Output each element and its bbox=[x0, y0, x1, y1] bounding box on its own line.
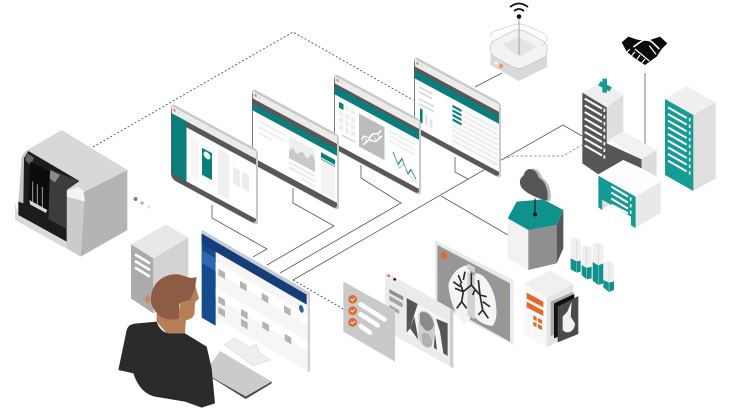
screen bbox=[202, 230, 310, 380]
icon: x-ray browser panel bbox=[385, 272, 453, 368]
desk items bbox=[210, 338, 272, 399]
monitor stand bbox=[224, 338, 270, 366]
person at workstation bbox=[118, 274, 215, 408]
icon: hospital annex bbox=[598, 160, 661, 228]
keyboard bbox=[210, 351, 272, 399]
icon: handshake bbox=[622, 37, 667, 65]
icon: lung scan panel bbox=[435, 240, 513, 345]
main workstation monitor bbox=[202, 230, 310, 380]
head bbox=[145, 274, 199, 320]
icon: desktop tower bbox=[131, 224, 188, 313]
icon: tall teal building bbox=[665, 86, 716, 191]
monitor 3: DNA analysis bbox=[334, 73, 421, 196]
icon: wifi router bbox=[490, 4, 547, 81]
icon: reagent vials bbox=[571, 238, 614, 292]
icon: checklist panel bbox=[343, 282, 395, 362]
progress dots bbox=[134, 197, 150, 208]
icon: cloud server bbox=[508, 168, 563, 270]
monitor 4: data table bbox=[414, 56, 501, 179]
monitor 1: sample tube bbox=[171, 103, 258, 226]
monitor 2: area chart bbox=[252, 88, 339, 211]
icon: hospital building bbox=[582, 79, 657, 177]
neck bbox=[157, 308, 187, 333]
connection lines bbox=[93, 32, 645, 310]
torso bbox=[118, 322, 215, 408]
icon: orange report cabinet bbox=[524, 271, 578, 347]
icon: analyzer instrument bbox=[15, 130, 127, 257]
